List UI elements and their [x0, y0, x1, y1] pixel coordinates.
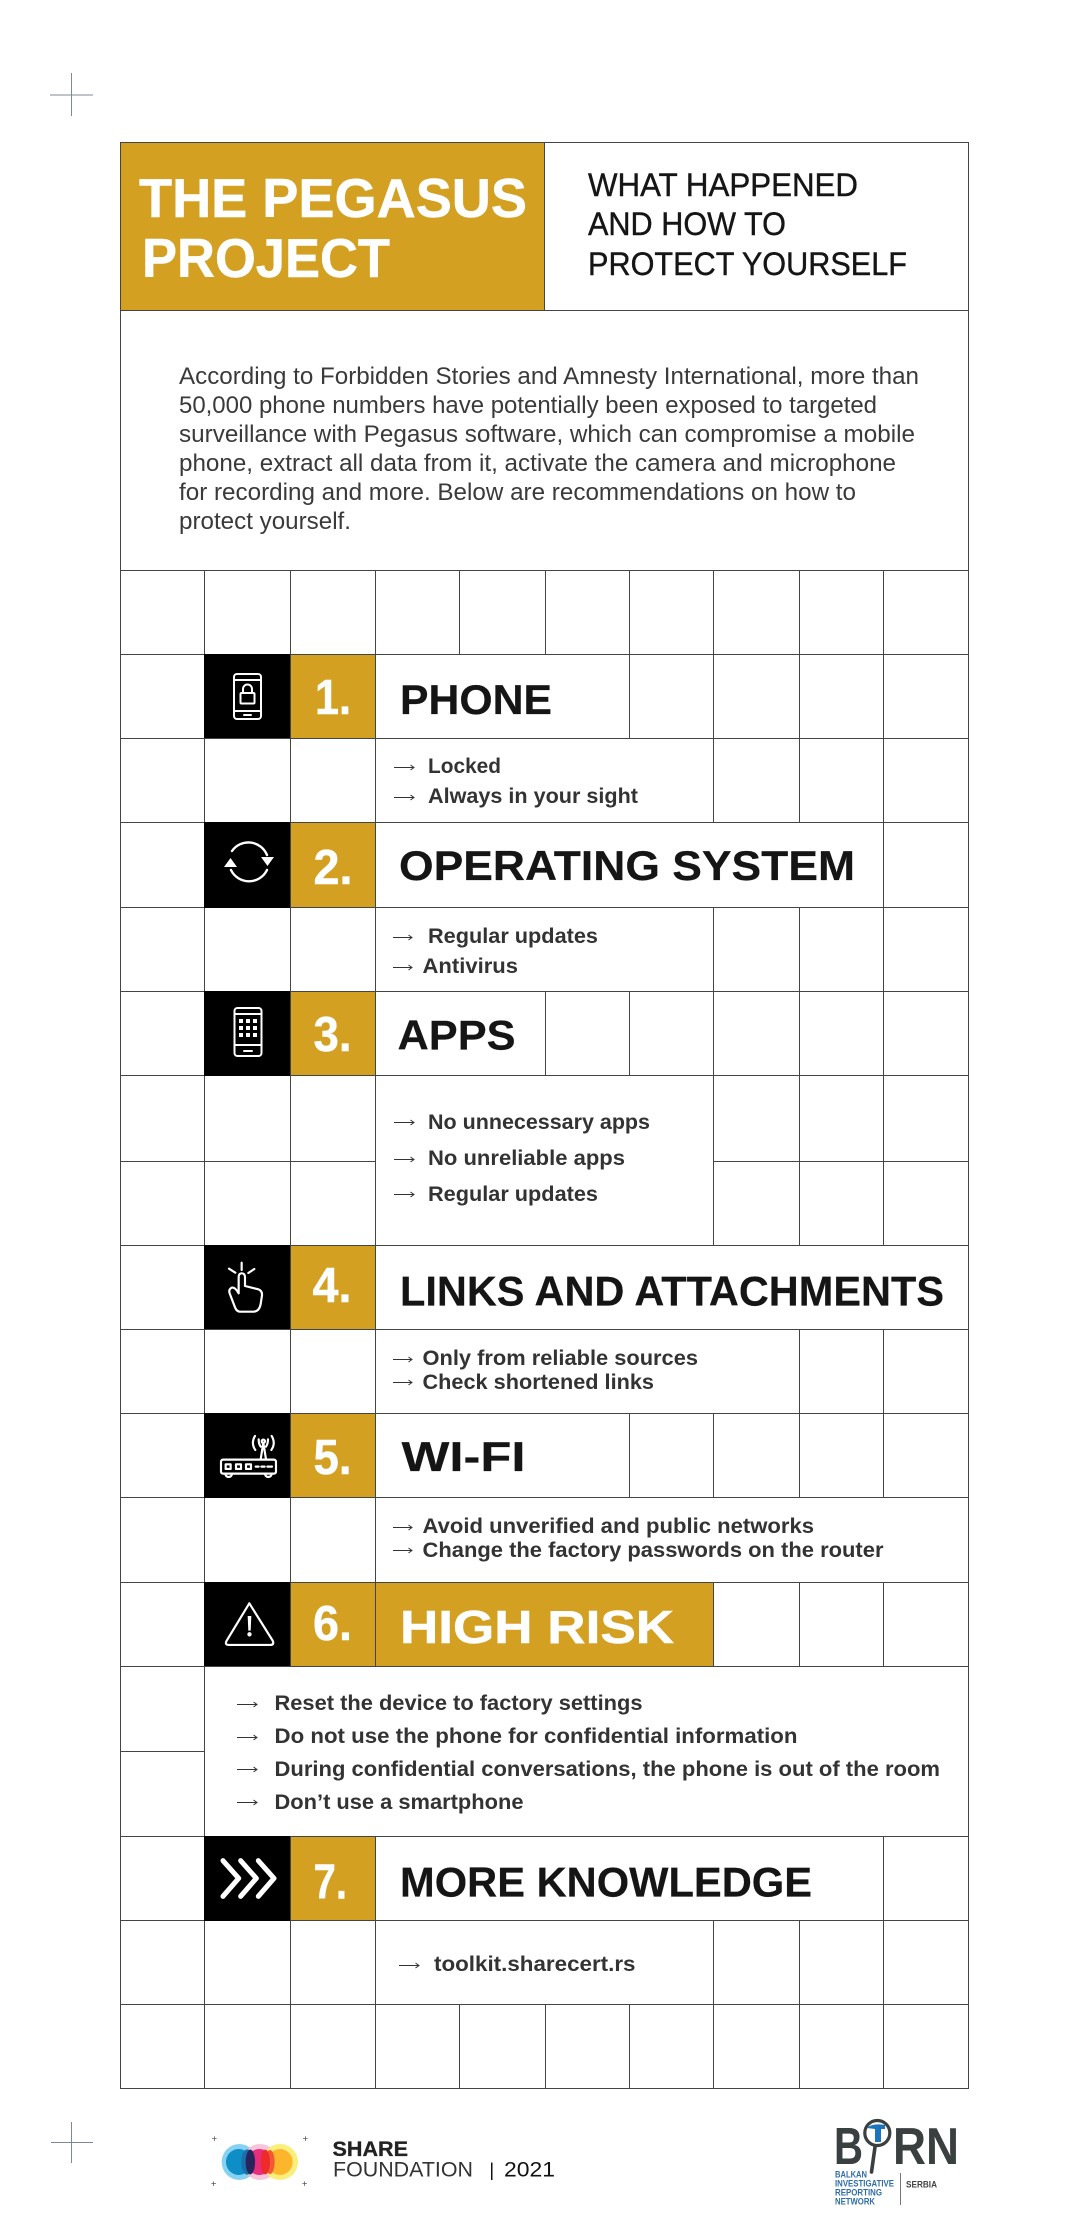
intro text: According to Forbidden Stories and Amnesty International, more than — [179, 363, 919, 390]
title — [139, 168, 527, 289]
number 7: 7. — [314, 1856, 347, 1910]
icon: tapping hand — [204, 1245, 291, 1329]
logo mark: overlapping circles — [211, 2136, 308, 2186]
number 3: 3. — [314, 1008, 352, 1062]
item: no smartphone: Don’t use a smartphone — [274, 1791, 524, 1814]
crop mark: bottom — [51, 2122, 93, 2163]
number 5: 5. — [314, 1431, 352, 1485]
list: high risk tips — [204, 1666, 968, 1836]
number 4 — [290, 1246, 376, 1330]
crop mark: top — [50, 73, 93, 116]
number 3 — [290, 992, 376, 1076]
section 5: wi-fi — [204, 1413, 968, 1582]
section 4: links and attachments — [204, 1245, 968, 1414]
list: operating system tips — [376, 908, 714, 992]
item: confidential information: Do not use the phone for confidential information — [274, 1725, 798, 1748]
header panel — [120, 142, 968, 310]
logo: SHARE Foundation — [211, 2136, 555, 2186]
section 6: high risk — [204, 1582, 968, 1836]
list: links tips — [376, 1330, 800, 1414]
heading: apps: APPS — [398, 1012, 516, 1058]
heading: high risk — [376, 1582, 714, 1666]
item: confidential conversations: During confidential conversations, the phone is out of the room — [274, 1758, 940, 1781]
icon: warning triangle — [204, 1582, 291, 1667]
intro text — [179, 363, 919, 535]
heading: operating system — [376, 822, 884, 908]
section 3: apps — [204, 991, 714, 1246]
wordmark: BIRN letters: RN — [893, 2118, 959, 2176]
item: change factory passwords: Change the factory passwords on the router — [422, 1539, 884, 1562]
panel: introduction — [120, 310, 968, 570]
item: no unnecessary apps: No unnecessary apps — [428, 1111, 650, 1134]
item: avoid unverified networks: Avoid unverified and public networks — [422, 1515, 814, 1538]
item: reset device: Reset the device to factory settings — [274, 1692, 642, 1715]
subtitle block — [544, 142, 968, 310]
wordmark: BIRN letters: B — [834, 2118, 863, 2176]
logo: BIRN — [834, 2118, 959, 2208]
item: no unreliable apps: No unreliable apps — [428, 1147, 625, 1170]
intro text: 50,000 phone numbers have potentially been exposed to targeted — [179, 392, 877, 419]
number 7 — [290, 1836, 376, 1920]
number 4: 4. — [312, 1259, 352, 1313]
list: phone tips — [376, 738, 714, 822]
heading: high risk: HIGH RISK — [400, 1601, 674, 1653]
text: Serbia: SERBIA — [906, 2180, 937, 2190]
intro text: protect yourself. — [179, 508, 351, 535]
intro text: phone, extract all data from it, activate the camera and microphone — [179, 450, 896, 477]
heading: links and attachments — [376, 1246, 968, 1330]
subtitle — [588, 167, 907, 282]
heading: apps — [376, 992, 546, 1076]
text: Balkan Investigative Reporting Network — [835, 2170, 894, 2208]
title: THE PEGASUS — [139, 168, 527, 229]
item: check shortened links: Check shortened links — [422, 1371, 654, 1394]
section 2: operating system — [204, 822, 884, 992]
number 1: 1. — [315, 671, 351, 725]
icon: phone with app grid — [204, 991, 291, 1076]
wordmark: FOUNDATION: FOUNDATION — [333, 2158, 473, 2182]
item: locked: Locked — [428, 755, 501, 778]
number 2 — [290, 822, 376, 908]
text: Balkan Investigative Reporting Network: INVESTIGATIVE — [835, 2178, 894, 2190]
icon: locked phone — [204, 654, 291, 738]
intro text: surveillance with Pegasus software, which can compromise a mobile — [179, 421, 915, 448]
item: always in your sight: Always in your sight — [428, 785, 638, 808]
heading: more knowledge — [376, 1836, 884, 1920]
item: regular updates: Regular updates — [428, 925, 598, 948]
item: toolkit link: toolkit.sharecert.rs — [434, 1953, 636, 1976]
text: Balkan Investigative Reporting Network: REPORTING — [835, 2188, 882, 2198]
subtitle: WHAT HAPPENED — [588, 167, 858, 203]
number 1 — [290, 654, 376, 738]
magnifying glass — [865, 2120, 890, 2172]
icon: chevrons — [204, 1836, 291, 1921]
year: 2021: 2021 — [504, 2158, 555, 2182]
number 6 — [290, 1582, 376, 1666]
title: PROJECT — [142, 228, 390, 289]
number 6: 6. — [313, 1597, 352, 1651]
subtitle: PROTECT YOURSELF — [588, 246, 907, 282]
item: antivirus: Antivirus — [422, 955, 518, 978]
text: Balkan Investigative Reporting Network: BALKAN — [835, 2170, 867, 2180]
heading: links and attachments: LINKS AND ATTACHMENTS — [400, 1268, 944, 1314]
intro text: for recording and more. Below are recommendations on how to — [179, 479, 856, 506]
heading: operating system: OPERATING SYSTEM — [399, 842, 855, 889]
list: more knowledge link — [376, 1920, 714, 2004]
text: Balkan Investigative Reporting Network: NETWORK — [835, 2196, 875, 2208]
heading: wi-fi: WI-FI — [402, 1433, 526, 1480]
wordmark: SHARE: SHARE — [332, 2138, 408, 2161]
icon: refresh arrows — [204, 822, 291, 908]
section 7: more knowledge — [204, 1836, 884, 2004]
item: only from reliable sources: Only from reliable sources — [422, 1347, 698, 1370]
list: wi-fi tips — [376, 1498, 968, 1582]
wordmark: BIRN letters — [834, 2118, 959, 2176]
icon: router — [204, 1413, 291, 1498]
heading: wi-fi — [376, 1414, 630, 1498]
number 5 — [290, 1414, 376, 1498]
item: locked — [394, 755, 501, 778]
heading: phone: PHONE — [400, 676, 552, 723]
heading: phone — [376, 654, 630, 738]
item: regular updates: Regular updates — [428, 1183, 598, 1206]
gold title block — [120, 142, 544, 310]
heading: more knowledge: MORE KNOWLEDGE — [400, 1858, 812, 1906]
subtitle: AND HOW TO — [588, 206, 786, 242]
section 1: phone — [204, 654, 714, 822]
list: apps tips — [376, 1076, 714, 1246]
number 2: 2. — [314, 841, 352, 895]
